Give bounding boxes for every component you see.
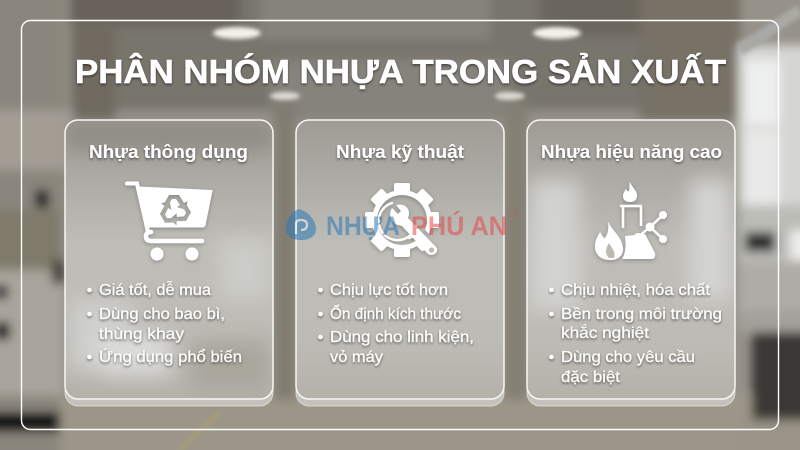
text: bullet list: Chịu nhiệt, hóa chất: [561, 282, 711, 299]
heading: Nhựa kỹ thuật: [336, 141, 464, 162]
text: bullet list: Dùng cho yêu cầu: [561, 349, 695, 366]
text: bullet list: Ứng dụng phổ biến: [99, 347, 242, 366]
panel: nhựa hiệu năng cao: [527, 120, 735, 406]
panel: nhựa thông dụng: [65, 120, 273, 406]
text: bullet list: vỏ máy: [330, 349, 383, 366]
panel: nhựa kỹ thuật: [296, 120, 504, 406]
heading: Nhựa hiệu năng cao: [541, 141, 722, 162]
text: bullet list: Chịu lực tốt hơn: [330, 282, 448, 299]
text: bullet list: đặc biệt: [561, 369, 621, 386]
icon: flask, flames and molecule: [595, 182, 667, 260]
icon: gear and wrench: [365, 183, 439, 257]
icon: recycling shopping cart: [127, 184, 212, 260]
text: bullet list: Bền trong môi trường: [561, 306, 722, 323]
title: PHÂN NHÓM NHỰA TRONG SẢN XUẤT: [75, 53, 726, 90]
watermark logo: NHỰA: [326, 211, 400, 241]
text: bullet list: Dùng cho bao bì,: [99, 306, 225, 323]
text: bullet list: [87, 280, 242, 366]
text: bullet list: thùng khay: [99, 326, 184, 343]
text: bullet list: Dùng cho linh kiện,: [330, 329, 474, 346]
text: bullet list: [549, 282, 722, 386]
watermark logo: PHÚ AN: [411, 210, 507, 241]
heading: Nhựa thông dụng: [89, 141, 248, 162]
watermark logo: [286, 209, 516, 241]
text: bullet list: Ổn định kích thước: [330, 304, 461, 323]
text: bullet list: Giá tốt, dễ mua: [99, 280, 211, 299]
text: bullet list: khắc nghiệt: [561, 323, 650, 342]
text: bullet list: [318, 282, 474, 366]
